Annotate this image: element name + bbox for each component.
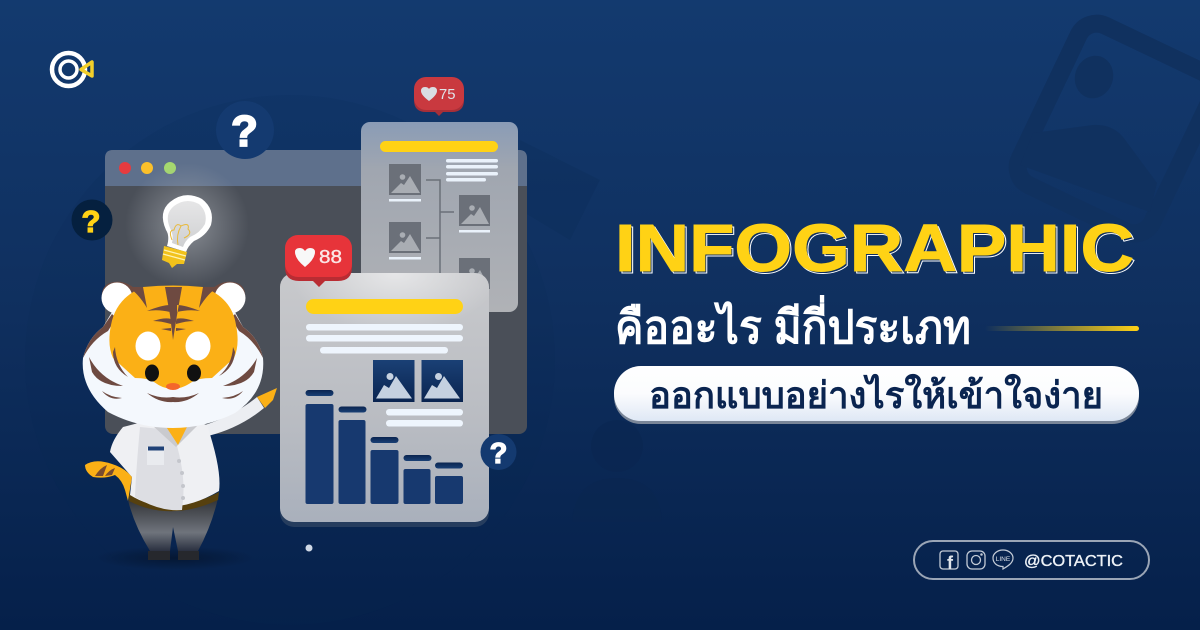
image thumbnails	[373, 360, 463, 402]
icon: question bottom: ?	[490, 438, 507, 470]
logo	[52, 53, 92, 86]
icon: line	[993, 550, 1013, 569]
background photo icon watermark	[1011, 17, 1200, 240]
icon: question yellow: ?	[82, 204, 100, 239]
shoes	[148, 551, 199, 560]
heading: INFOGRAPHIC: INFOGRAPHIC	[617, 213, 1136, 288]
arm raised	[205, 397, 264, 436]
ears	[102, 282, 145, 320]
subheading: คืออะไร มีกี่ประเภท	[615, 295, 971, 353]
pocket	[147, 446, 164, 465]
collar	[152, 425, 198, 447]
ground shadow	[95, 546, 255, 570]
light glow	[125, 163, 249, 287]
icon: instagram	[967, 551, 985, 569]
outer mane	[83, 312, 263, 428]
accent line	[985, 326, 1139, 331]
nose	[166, 383, 180, 390]
browser window	[105, 150, 527, 434]
cheek stripes	[89, 347, 257, 399]
icon: question large: ?	[231, 107, 258, 156]
pants	[128, 498, 218, 551]
ear edges	[128, 287, 218, 308]
window buttons	[119, 162, 176, 174]
text lines	[306, 324, 463, 426]
dot	[306, 544, 312, 552]
belt	[129, 492, 219, 511]
icon: question large	[216, 101, 274, 159]
badge: 75 likes: 75	[439, 86, 456, 103]
bar chart	[306, 390, 463, 504]
tail	[85, 461, 132, 501]
body shirt	[110, 420, 220, 507]
connector lines	[426, 180, 454, 275]
heading: INFOGRAPHIC: INFOGRAPHIC	[615, 211, 1134, 286]
mouth	[147, 393, 199, 402]
icon: facebook	[940, 551, 958, 573]
text lines	[446, 159, 498, 182]
icon: light bulb	[162, 195, 212, 268]
social pill: @COTACTIC	[1024, 553, 1123, 570]
badge: 75 likes	[414, 77, 464, 116]
head stripes	[147, 287, 200, 340]
face	[109, 286, 238, 388]
front document panel	[280, 273, 489, 527]
pill subtitle: ออกแบบอย่างไรให้เข้าใจง่าย	[649, 373, 1103, 416]
eye patches	[136, 332, 160, 360]
background person icon watermark	[572, 420, 662, 522]
buttons	[177, 459, 185, 500]
icon: question yellow	[72, 200, 112, 240]
back document panel	[361, 122, 518, 312]
eyes	[145, 364, 159, 382]
social pill	[914, 541, 1149, 579]
badge: 88 likes: 88	[319, 246, 342, 267]
icon: line: LINE	[996, 556, 1011, 563]
tiger character	[83, 282, 277, 570]
icon: facebook: f	[947, 553, 954, 573]
icon: question bottom	[480, 434, 516, 470]
badge: 88 likes	[285, 235, 352, 287]
pill subtitle	[614, 366, 1139, 424]
thumbnails	[389, 164, 490, 289]
